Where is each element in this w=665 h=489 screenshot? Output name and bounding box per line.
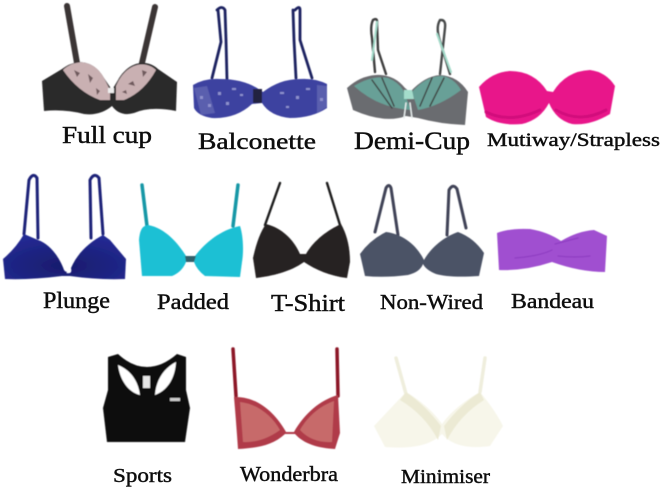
illustration: non-wired bra xyxy=(360,186,484,277)
item: wonderbra xyxy=(233,349,340,486)
illustration: balconette bra xyxy=(193,8,327,118)
illustration: wonderbra xyxy=(233,349,340,449)
item: non-wired xyxy=(360,186,484,314)
illustration: padded bra xyxy=(139,185,243,277)
label: Minimiser: Minimiser xyxy=(401,466,490,488)
item: plunge xyxy=(3,175,126,313)
illustration: sports bra xyxy=(103,354,190,442)
item: full cup xyxy=(42,6,177,149)
item: demi-cup xyxy=(347,19,470,155)
label: Non-Wired: Non-Wired xyxy=(380,290,484,314)
label: Mutiway/Strapless: Mutiway/Strapless xyxy=(487,130,660,151)
item: padded xyxy=(139,185,243,314)
item: bandeau xyxy=(497,229,607,313)
label: Balconette: Balconette xyxy=(198,129,316,154)
label: Demi-Cup: Demi-Cup xyxy=(354,128,470,155)
item: sports xyxy=(103,354,190,487)
item: balconette xyxy=(193,8,327,154)
label: Full cup: Full cup xyxy=(62,123,152,149)
illustration: minimiser bra xyxy=(374,358,503,448)
label: Padded: Padded xyxy=(157,289,229,314)
label: T-Shirt: T-Shirt xyxy=(271,291,345,317)
illustration: t-shirt bra xyxy=(253,183,350,278)
illustration: bandeau top xyxy=(497,229,607,272)
label: Wonderbra: Wonderbra xyxy=(240,462,339,486)
item: t-shirt xyxy=(253,183,350,317)
item: multiway strapless xyxy=(479,70,660,151)
item: minimiser xyxy=(374,358,503,488)
illustration: plunge bra xyxy=(3,175,126,279)
label: Sports: Sports xyxy=(113,465,172,487)
illustration: full cup bra xyxy=(42,6,177,114)
label: Bandeau: Bandeau xyxy=(511,289,595,313)
illustration: strapless bra xyxy=(479,70,615,124)
label: Plunge: Plunge xyxy=(43,288,110,313)
illustration: demi-cup bra xyxy=(347,19,468,125)
